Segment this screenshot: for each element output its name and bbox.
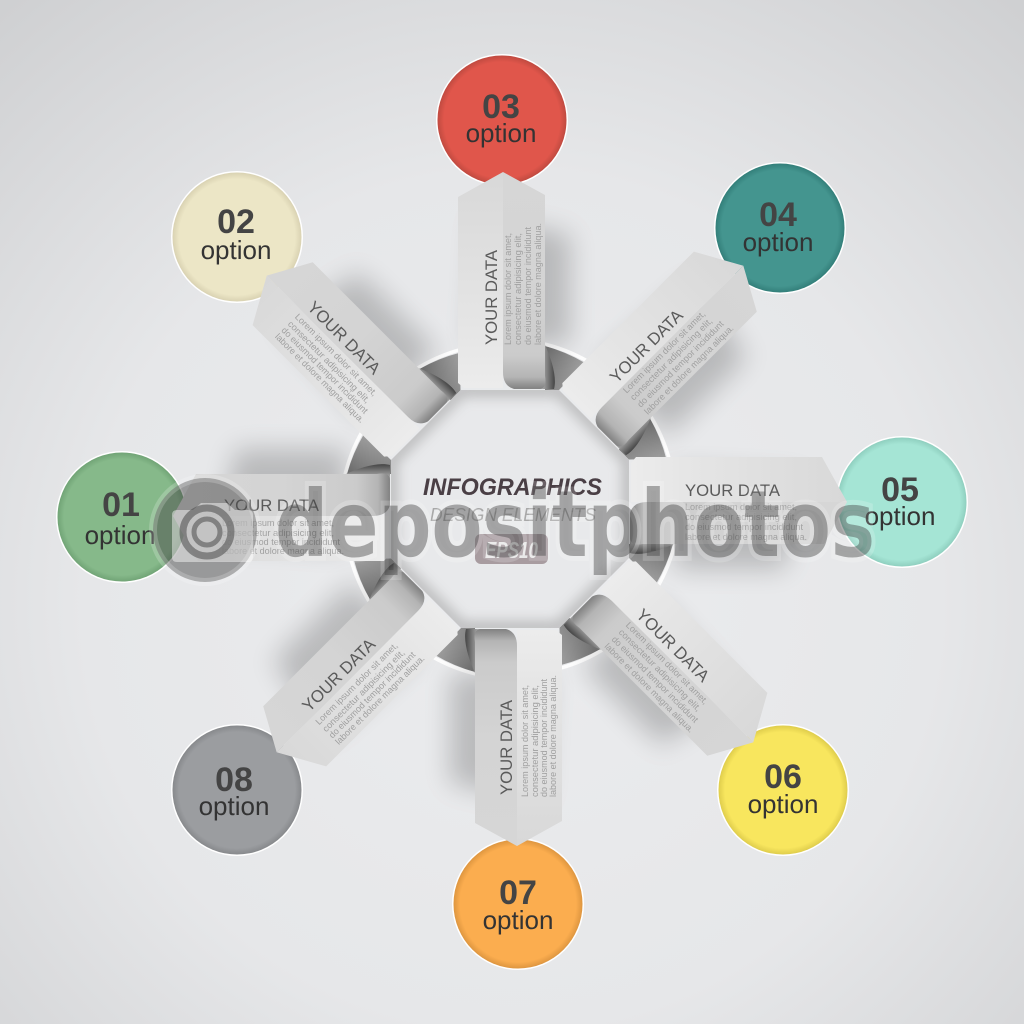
strip 01: consectetur adipisicing elit, bbox=[222, 528, 334, 538]
circle 01: 01 bbox=[102, 486, 140, 524]
central octagon bbox=[385, 385, 635, 635]
circle 07 bbox=[452, 838, 584, 970]
circle 01: option bbox=[85, 520, 155, 550]
watermark: wordmark: depositphotos bbox=[275, 471, 875, 578]
strip 03: Lorem ipsum dolor sit amet, bbox=[503, 233, 513, 345]
strip 01: labore et dolore magna aliqua. bbox=[222, 546, 344, 556]
circle 02: option bbox=[201, 235, 271, 265]
circle 03 bbox=[436, 54, 568, 186]
strip 05: Lorem ipsum dolor sit amet, bbox=[685, 502, 797, 512]
strip 06: labore et dolore magna aliqua. bbox=[603, 641, 696, 735]
strip 04: labore et dolore magna aliqua. bbox=[642, 323, 736, 416]
strip 06: consectetur adipisicing elit, bbox=[617, 627, 703, 713]
circle 05: 05 bbox=[881, 471, 919, 509]
strip 02: do eiusmod tempor incididunt bbox=[279, 325, 370, 416]
circle 08: 08 bbox=[215, 761, 253, 799]
strip 04: do eiusmod tempor incididunt bbox=[635, 318, 726, 409]
circle 08: option bbox=[199, 791, 269, 821]
strip 07: YOUR DATA bbox=[497, 699, 516, 795]
strip 02 bbox=[235, 228, 468, 461]
strip 03: do eiusmod tempor incididunt bbox=[523, 227, 533, 345]
circle 04 bbox=[714, 162, 846, 294]
strip 01 bbox=[173, 449, 390, 561]
strip 06 bbox=[552, 557, 785, 790]
circle 06: option bbox=[748, 789, 818, 819]
strip 08: do eiusmod tempor incididunt bbox=[327, 649, 418, 740]
strip 04: Lorem ipsum dolor sit amet, bbox=[621, 309, 707, 395]
strip 07: Lorem ipsum dolor sit amet, bbox=[520, 685, 530, 797]
strip 05: YOUR DATA bbox=[685, 481, 781, 500]
strip 01: do eiusmod tempor incididunt bbox=[222, 537, 340, 547]
strip 04: YOUR DATA bbox=[606, 306, 687, 387]
strip 06: do eiusmod tempor incididunt bbox=[610, 634, 701, 725]
circle 02 bbox=[171, 171, 303, 303]
strip 08: YOUR DATA bbox=[299, 634, 380, 715]
strip 05: do eiusmod tempor incididunt bbox=[685, 522, 803, 532]
circle 04: 04 bbox=[759, 196, 797, 234]
title: INFOGRAPHICS bbox=[423, 474, 602, 501]
circle 07: 07 bbox=[499, 874, 537, 912]
circle 07: option bbox=[483, 905, 553, 935]
badge: EPS10: EPS10 bbox=[485, 537, 538, 563]
circle 05 bbox=[836, 436, 968, 568]
strip 05 bbox=[630, 457, 847, 569]
strip 03: YOUR DATA bbox=[482, 249, 501, 345]
strip 05: consectetur adipisicing elit, bbox=[685, 512, 797, 522]
central ring wedges bbox=[337, 336, 683, 682]
circle 06 bbox=[717, 724, 849, 856]
watermark: camera icon bbox=[153, 478, 257, 582]
strip 04 bbox=[558, 234, 791, 467]
circle 03: 03 bbox=[482, 88, 520, 126]
strip 06: Lorem ipsum dolor sit amet, bbox=[624, 620, 710, 706]
badge: EPS10 bbox=[475, 534, 548, 564]
strip 03 bbox=[458, 172, 570, 389]
strip 02: Lorem ipsum dolor sit amet, bbox=[293, 312, 379, 398]
strip 07 bbox=[450, 629, 562, 846]
strip 05: labore et dolore magna aliqua. bbox=[685, 532, 807, 542]
circle 04: option bbox=[743, 227, 813, 257]
strip 07: do eiusmod tempor incididunt bbox=[539, 679, 549, 797]
strip 01: Lorem ipsum dolor sit amet, bbox=[222, 518, 334, 528]
strip 08: consectetur adipisicing elit, bbox=[320, 648, 407, 734]
circle 06: 06 bbox=[764, 758, 802, 796]
strip 08: Lorem ipsum dolor sit amet, bbox=[313, 641, 400, 727]
strip 08 bbox=[229, 551, 462, 784]
circle 01 bbox=[56, 451, 188, 583]
subtitle: DESIGN ELEMENTS bbox=[430, 505, 596, 525]
strip 03: labore et dolore magna aliqua. bbox=[533, 223, 543, 345]
strip 02: consectetur adipisicing elit, bbox=[286, 319, 372, 405]
strip 08: labore et dolore magna aliqua. bbox=[333, 653, 427, 747]
strip 07: consectetur adipisicing elit, bbox=[530, 685, 540, 797]
strip 07: labore et dolore magna aliqua. bbox=[548, 675, 558, 797]
strip 02: labore et dolore magna aliqua. bbox=[273, 332, 366, 425]
circle 03: option bbox=[466, 118, 536, 148]
strip 01: YOUR DATA bbox=[224, 496, 320, 515]
strip 03: consectetur adipisicing elit, bbox=[513, 233, 523, 345]
circle 05: option bbox=[865, 501, 935, 531]
strip 02: YOUR DATA bbox=[304, 298, 385, 379]
circle 08 bbox=[171, 724, 303, 856]
circle 02: 02 bbox=[217, 203, 255, 241]
strip 06: YOUR DATA bbox=[632, 605, 713, 686]
strip 04: consectetur adipisicing elit, bbox=[628, 316, 714, 402]
